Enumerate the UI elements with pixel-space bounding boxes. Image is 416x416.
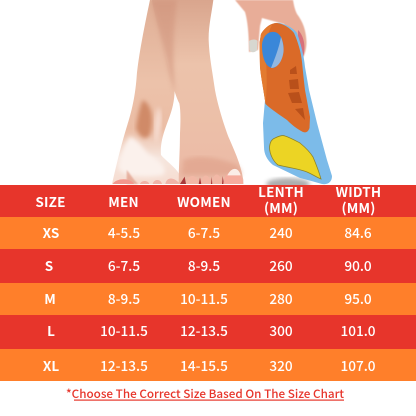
row XL: 12-13.5 — [100, 355, 148, 375]
row L: L — [47, 320, 55, 340]
table header row: (MM) — [341, 197, 376, 217]
forefoot pad — [270, 136, 321, 179]
row XL: 14-15.5 — [180, 355, 228, 375]
row S — [0, 249, 416, 283]
insole orange shell — [260, 23, 310, 132]
hand — [235, 0, 306, 60]
row M: 10-11.5 — [180, 288, 228, 308]
row XL: XL — [43, 355, 59, 375]
row L: 12-13.5 — [180, 320, 228, 340]
row L: 101.0 — [340, 320, 376, 340]
ground shadow — [266, 178, 310, 190]
photo: feet and insole — [112, 0, 332, 190]
row S: 8-9.5 — [188, 255, 220, 275]
table header row: MEN — [108, 191, 139, 211]
back left foot — [112, 0, 181, 184]
insole — [260, 23, 332, 184]
table header row: WOMEN — [177, 191, 231, 211]
table header row: (MM) — [264, 197, 298, 217]
row L — [0, 315, 416, 349]
row XS: XS — [43, 222, 59, 242]
row XS — [0, 217, 416, 249]
row XS: 4-5.5 — [108, 222, 140, 242]
row XS: 240 — [269, 222, 293, 242]
row M: 95.0 — [344, 288, 372, 308]
row XL: 107.0 — [340, 355, 376, 375]
table header row: WIDTH — [336, 181, 381, 201]
footnote: *Choose The Correct Size Based On The Size Chart — [66, 385, 344, 402]
insole blue base — [260, 23, 332, 184]
size table — [0, 181, 416, 381]
arch vents — [288, 66, 305, 120]
front right foot — [152, 0, 243, 184]
row L: 300 — [269, 320, 293, 340]
row S: 260 — [269, 255, 293, 275]
row M: 280 — [269, 288, 293, 308]
row S: 6-7.5 — [108, 255, 140, 275]
table header row — [0, 181, 416, 217]
row XS: 6-7.5 — [188, 222, 220, 242]
row M: 8-9.5 — [108, 288, 140, 308]
row XS: 84.6 — [344, 222, 372, 242]
table header row: LENTH — [258, 181, 304, 201]
heel cup — [262, 32, 284, 68]
row L: 10-11.5 — [100, 320, 148, 340]
row XL — [0, 349, 416, 381]
row XL: 320 — [269, 355, 293, 375]
row S: S — [45, 255, 53, 275]
row S: 90.0 — [344, 255, 372, 275]
row M — [0, 283, 416, 315]
row M: M — [44, 288, 56, 308]
table header row: SIZE — [35, 191, 66, 211]
